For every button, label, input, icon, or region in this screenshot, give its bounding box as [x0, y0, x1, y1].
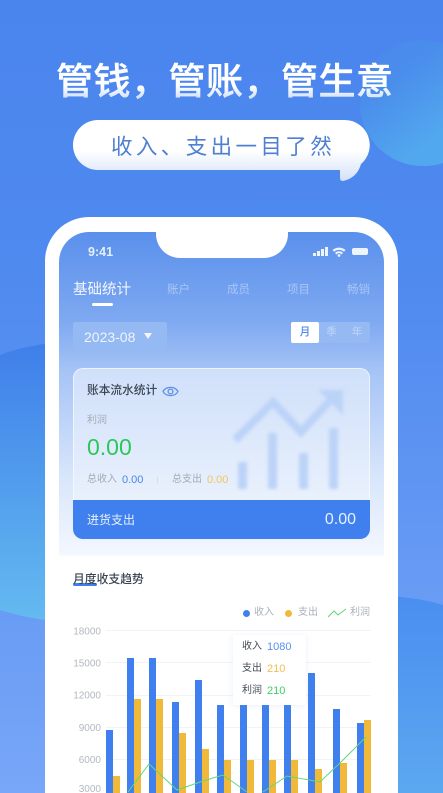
y axis labels: 18000 — [73, 626, 101, 638]
tab: accounts: 账户 — [167, 284, 190, 296]
card title: 账本流水统计 — [87, 384, 157, 397]
phone frame — [45, 217, 398, 793]
tabs — [73, 281, 370, 306]
tab: members: 成员 — [227, 284, 250, 296]
total income: 总收入 — [87, 474, 117, 485]
tooltip profit: 利润 — [242, 685, 262, 696]
active month: 月 — [300, 326, 310, 338]
tooltip income: 收入 — [242, 641, 262, 652]
status bar time: 9:41 — [88, 245, 113, 259]
legend: profit: 利润 — [350, 607, 370, 618]
date picker — [73, 322, 167, 350]
quarter: 季 — [326, 326, 337, 338]
total income value: 0.00 — [122, 474, 143, 486]
profit label: 利润 — [87, 415, 107, 426]
legend: expense: 支出 — [298, 607, 318, 618]
tooltip income value: 1080 — [267, 641, 291, 653]
legend — [243, 606, 370, 618]
tab: projects: 项目 — [287, 284, 310, 296]
period switch — [291, 322, 370, 343]
tooltip profit value: 210 — [267, 685, 285, 697]
profit line — [128, 737, 366, 792]
date picker: 2023-08 — [84, 329, 135, 345]
y axis labels — [73, 626, 101, 793]
legend: income: 收入 — [254, 607, 274, 618]
legend: profit — [328, 606, 370, 618]
y axis labels: 9000 — [79, 723, 101, 734]
bar chart — [73, 626, 371, 793]
tooltip expense value: 210 — [267, 663, 285, 675]
tooltip expense: 支出 — [242, 663, 262, 674]
total expense: 总支出 — [172, 474, 202, 485]
statistics card — [73, 368, 370, 539]
headline: 管钱，管账，管生意 — [56, 61, 394, 102]
icon: eye — [162, 386, 179, 396]
phone screen — [59, 232, 384, 793]
purchase value: 0.00 — [325, 511, 356, 528]
active tab: 基础统计 — [73, 282, 131, 298]
chart title: 月度收支趋势 — [73, 572, 144, 586]
tooltip — [233, 635, 306, 705]
separator — [157, 477, 158, 483]
purchase label: 进货支出 — [87, 513, 135, 527]
legend: income — [243, 606, 274, 618]
status icons — [313, 247, 368, 257]
year: 年 — [352, 326, 362, 338]
y axis labels: 12000 — [73, 690, 101, 702]
active tab underline — [92, 303, 113, 306]
legend: expense — [285, 606, 318, 618]
speech bubble — [73, 120, 370, 181]
bubble text: 收入、支出一目了然 — [111, 135, 335, 159]
expense bars — [113, 699, 371, 793]
tab: best sellers: 畅销 — [347, 284, 370, 296]
y axis labels: 6000 — [79, 755, 101, 766]
dropdown arrow — [144, 333, 152, 339]
notch — [156, 230, 288, 258]
profit value: 0.00 — [87, 434, 132, 460]
footer bar — [73, 500, 370, 539]
card watermark chart icon — [232, 390, 344, 490]
active month — [291, 322, 319, 343]
total expense value: 0.00 — [207, 474, 228, 486]
title underline — [73, 583, 97, 586]
y axis labels: 15000 — [73, 658, 101, 670]
income bars — [106, 658, 364, 793]
